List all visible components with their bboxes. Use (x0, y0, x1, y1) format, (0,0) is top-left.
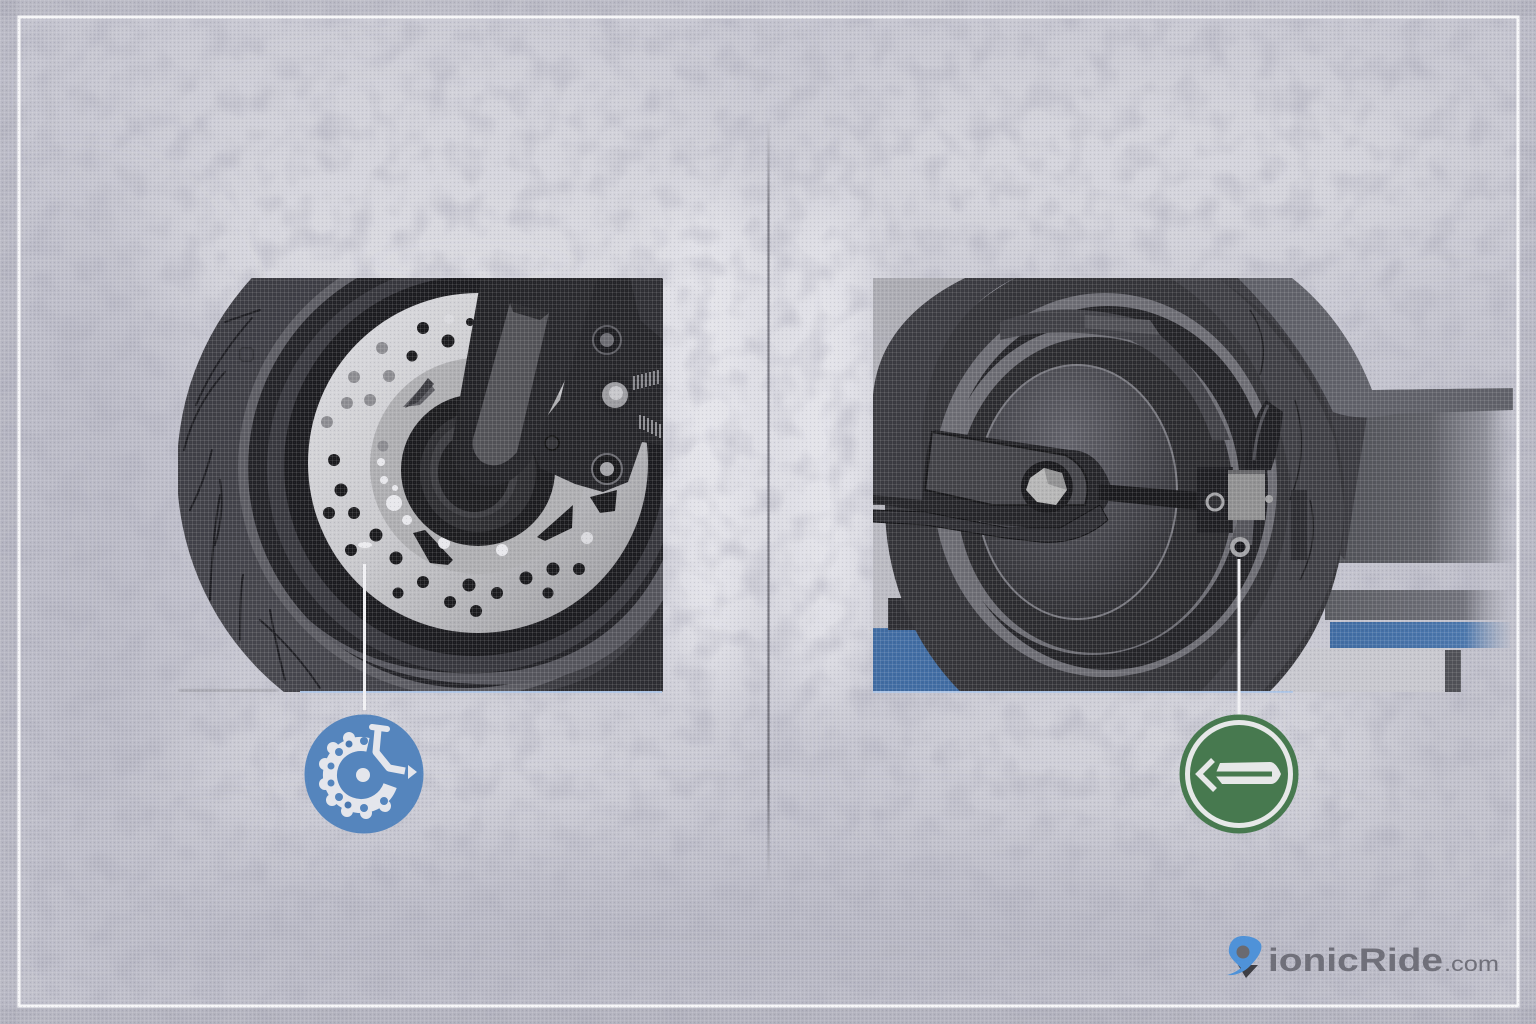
front rim rings (238, 278, 663, 691)
panel: rear wheel photo with hub motor (873, 278, 1513, 692)
rear swing arch (873, 278, 1015, 505)
brake disc (308, 293, 648, 633)
front tire (178, 278, 663, 692)
callout line: disc brake (363, 564, 366, 710)
hub motor cover (977, 365, 1177, 619)
scooter body (1330, 388, 1513, 563)
icon: disc brake badge (304, 714, 424, 834)
photo background (873, 278, 993, 628)
rear fender (1238, 278, 1513, 418)
rear rim rings (933, 293, 1277, 677)
logo: ionicRide.com (1227, 936, 1499, 978)
center divider line (768, 118, 770, 883)
front hub (401, 394, 555, 546)
panel: front wheel photo with brake disc (178, 278, 663, 692)
icon: drum brake sensor badge (1180, 714, 1298, 834)
rear tire (885, 278, 1367, 691)
blue base edge under front photo (300, 691, 662, 693)
sensor bracket (1197, 400, 1283, 557)
icon: map pin (1227, 936, 1261, 978)
domain suffix: .com (1444, 953, 1499, 976)
sensor eyelet (1230, 537, 1250, 557)
front fork (452, 278, 597, 486)
caliper bracket and bolts (528, 278, 663, 492)
callout line: drum sensor (1238, 559, 1240, 715)
wordmark: ionicRide (1268, 942, 1443, 978)
axle arm with nut (873, 430, 1198, 542)
blue base edge under rear photo (873, 691, 1293, 693)
blue stand (873, 590, 1510, 692)
